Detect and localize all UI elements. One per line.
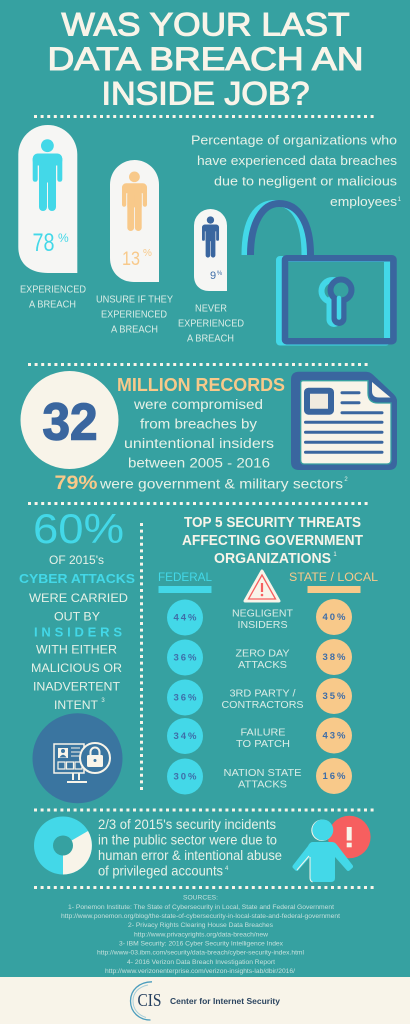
text: percentage of organizations: have experienced data breaches bbox=[197, 153, 397, 168]
sources: SOURCES: bbox=[183, 894, 218, 902]
text: security incidents: 2/3 of 2015's security incidents bbox=[98, 817, 276, 832]
text: security incidents: 4 bbox=[225, 866, 229, 872]
row: third party contractors: 3RD PARTY / bbox=[230, 688, 296, 700]
text: cyber attacks by insiders: MALICIOUS OR bbox=[31, 661, 122, 675]
row: negligent insiders: 40% bbox=[322, 612, 346, 623]
icon: person with alert bbox=[292, 816, 371, 882]
column header: federal bbox=[158, 572, 213, 593]
panel: breach percentages bbox=[18, 125, 244, 344]
text: million records: 2 bbox=[344, 477, 348, 483]
row: failure to patch: TO PATCH bbox=[236, 738, 290, 750]
row: zero day attacks: 36% bbox=[174, 652, 197, 664]
text: million records: from breaches by bbox=[140, 416, 258, 432]
chart: two thirds donut bbox=[34, 816, 92, 874]
row: failure to patch bbox=[167, 718, 352, 754]
text: cyber attacks by insiders: OF 2015's bbox=[49, 553, 104, 567]
text: cyber attacks by insiders: INADVERTENT bbox=[33, 680, 120, 694]
figure: experienced a breach 78%: A BREACH bbox=[29, 298, 76, 310]
text: security incidents: human error & intentional abuse bbox=[98, 848, 282, 863]
sources: http://www.verizonenterprise.com/verizon-insights-lab/dbir/2016/ bbox=[105, 968, 295, 975]
row: nation state attacks: ATTACKS bbox=[238, 778, 287, 790]
figure: unsure 13% bbox=[96, 160, 173, 336]
stat: 60%: 60% bbox=[33, 505, 124, 552]
row: third party contractors: 35% bbox=[322, 691, 346, 702]
text: million records: were government & military sectors bbox=[99, 476, 343, 492]
row: failure to patch: 34% bbox=[174, 731, 197, 742]
text: million records: between 2005 - 2016 bbox=[128, 456, 270, 472]
text: percentage of organizations: 1 bbox=[398, 197, 402, 203]
row: nation state attacks: 30% bbox=[174, 772, 197, 782]
heading bbox=[182, 515, 363, 567]
text: percentage of organizations: Percentage of organizations who bbox=[191, 132, 397, 148]
text: cyber attacks by insiders: CYBER ATTACKS bbox=[19, 571, 135, 586]
text: security incidents bbox=[98, 817, 282, 878]
row: zero day attacks: 38% bbox=[322, 652, 346, 663]
footer: CIS logo: CIS bbox=[138, 990, 162, 1010]
stat circle: 32: 32 bbox=[42, 394, 98, 452]
figure: never experienced 9%: 9 bbox=[210, 270, 216, 282]
figure: never experienced 9%: NEVER bbox=[195, 302, 227, 314]
panel: human error bbox=[34, 816, 371, 882]
row: zero day attacks bbox=[167, 639, 352, 676]
icon: open padlock bbox=[244, 203, 394, 342]
row: nation state attacks: NATION STATE bbox=[224, 767, 302, 779]
figure: experienced a breach 78%: EXPERIENCED bbox=[20, 284, 86, 296]
figure: never experienced 9%: % bbox=[217, 271, 223, 277]
icon: secure computer bbox=[32, 713, 122, 803]
text: security incidents: in the public sector were due to bbox=[98, 832, 277, 848]
title bbox=[48, 6, 364, 112]
text: security incidents: of privileged accounts bbox=[98, 864, 223, 878]
sources: 3- IBM Security: 2016 Cyber Security Intelligence Index bbox=[119, 940, 284, 948]
row: failure to patch: FAILURE bbox=[240, 726, 286, 738]
icon: document bbox=[291, 372, 397, 470]
text: cyber attacks by insiders bbox=[19, 553, 135, 712]
row: negligent insiders: INSIDERS bbox=[238, 619, 288, 631]
row: nation state attacks bbox=[167, 758, 352, 794]
figure: never experienced 9%: A BREACH bbox=[187, 332, 234, 344]
row: zero day attacks: ATTACKS bbox=[238, 659, 287, 671]
heading: TOP 5 SECURITY THREATS bbox=[184, 515, 361, 531]
stat circle: 32 bbox=[20, 371, 118, 469]
text: percentage of organizations: employees bbox=[330, 194, 397, 209]
row: negligent insiders bbox=[167, 599, 352, 636]
figure: experienced a breach 78%: % bbox=[58, 231, 69, 245]
row: third party contractors: CONTRACTORS bbox=[222, 699, 304, 711]
text: percentage of organizations: due to negligent or malicious bbox=[214, 174, 397, 188]
figure: never experienced 9% bbox=[178, 209, 244, 344]
text: million records: unintentional insiders bbox=[124, 436, 274, 452]
row: third party contractors: 36% bbox=[174, 692, 197, 704]
figure: unsure 13%: UNSURE IF THEY bbox=[96, 294, 173, 306]
panel: 32 million records bbox=[20, 371, 397, 494]
figure: unsure 13%: A BREACH bbox=[111, 324, 158, 336]
footer: CIS logo: Center for Internet Security bbox=[170, 996, 280, 1006]
text: cyber attacks by insiders: WERE CARRIED bbox=[29, 591, 128, 605]
sources: 1- Ponemon Institute: The State of Cybersecurity in Local, State and Federal Government bbox=[68, 904, 334, 911]
title: WAS YOUR LAST bbox=[62, 6, 350, 42]
sources: 2- Privacy Rights Clearing House Data Breaches bbox=[128, 922, 273, 929]
figure: never experienced 9%: EXPERIENCED bbox=[178, 318, 244, 330]
figure: unsure 13%: % bbox=[143, 248, 152, 259]
panel: top 5 security threats bbox=[158, 515, 379, 794]
sources: 4- 2016 Verizon Data Breach Investigation Report bbox=[127, 959, 275, 966]
figure: experienced a breach 78%: 78 bbox=[32, 229, 54, 257]
text: million records: were compromised bbox=[133, 397, 263, 413]
sources bbox=[61, 894, 340, 975]
column header: state and local: STATE / LOCAL bbox=[289, 572, 379, 584]
text: cyber attacks by insiders: INTENT bbox=[54, 698, 98, 712]
figure: unsure 13%: 13 bbox=[122, 249, 140, 270]
row: zero day attacks: ZERO DAY bbox=[236, 648, 290, 660]
text: million records: 79% bbox=[54, 473, 98, 494]
text: cyber attacks by insiders: OUT BY bbox=[54, 610, 100, 624]
figure: experienced a breach 78% bbox=[18, 125, 86, 310]
sources: http://www-03.ibm.com/security/data-breach/cyber-security-index.html bbox=[97, 950, 304, 957]
heading: 1 bbox=[333, 552, 337, 558]
icon: warning triangle bbox=[245, 571, 279, 601]
column header: federal: FEDERAL bbox=[158, 572, 213, 584]
row: negligent insiders: NEGLIGENT bbox=[232, 608, 294, 620]
figure: unsure 13%: EXPERIENCED bbox=[101, 308, 167, 320]
column header: state and local bbox=[289, 572, 379, 593]
text: million records: MILLION RECORDS bbox=[117, 375, 285, 395]
row: failure to patch: 43% bbox=[322, 730, 346, 742]
row: third party contractors bbox=[167, 678, 352, 716]
text: cyber attacks by insiders: WITH EITHER bbox=[36, 642, 117, 656]
footer: CIS logo bbox=[0, 977, 410, 1024]
sources: http://www.ponemon.org/blog/the-state-of-cybersecurity-in-local-state-and-federal-government bbox=[61, 913, 340, 920]
sources: http://www.privacyrights.org/data-breach/new bbox=[134, 931, 268, 938]
title: DATA BREACH AN bbox=[48, 41, 364, 77]
heading: ORGANIZATIONS bbox=[214, 551, 331, 567]
text: cyber attacks by insiders: 3 bbox=[101, 698, 105, 704]
panel: 60% of cyber attacks bbox=[19, 505, 135, 803]
text: cyber attacks by insiders: INSIDERS bbox=[34, 624, 122, 640]
row: negligent insiders: 44% bbox=[174, 612, 197, 624]
text: million records bbox=[54, 375, 348, 494]
heading: AFFECTING GOVERNMENT bbox=[182, 533, 363, 549]
text: percentage of organizations bbox=[191, 132, 402, 209]
row: nation state attacks: 16% bbox=[322, 771, 346, 782]
title: INSIDE JOB? bbox=[102, 76, 310, 112]
